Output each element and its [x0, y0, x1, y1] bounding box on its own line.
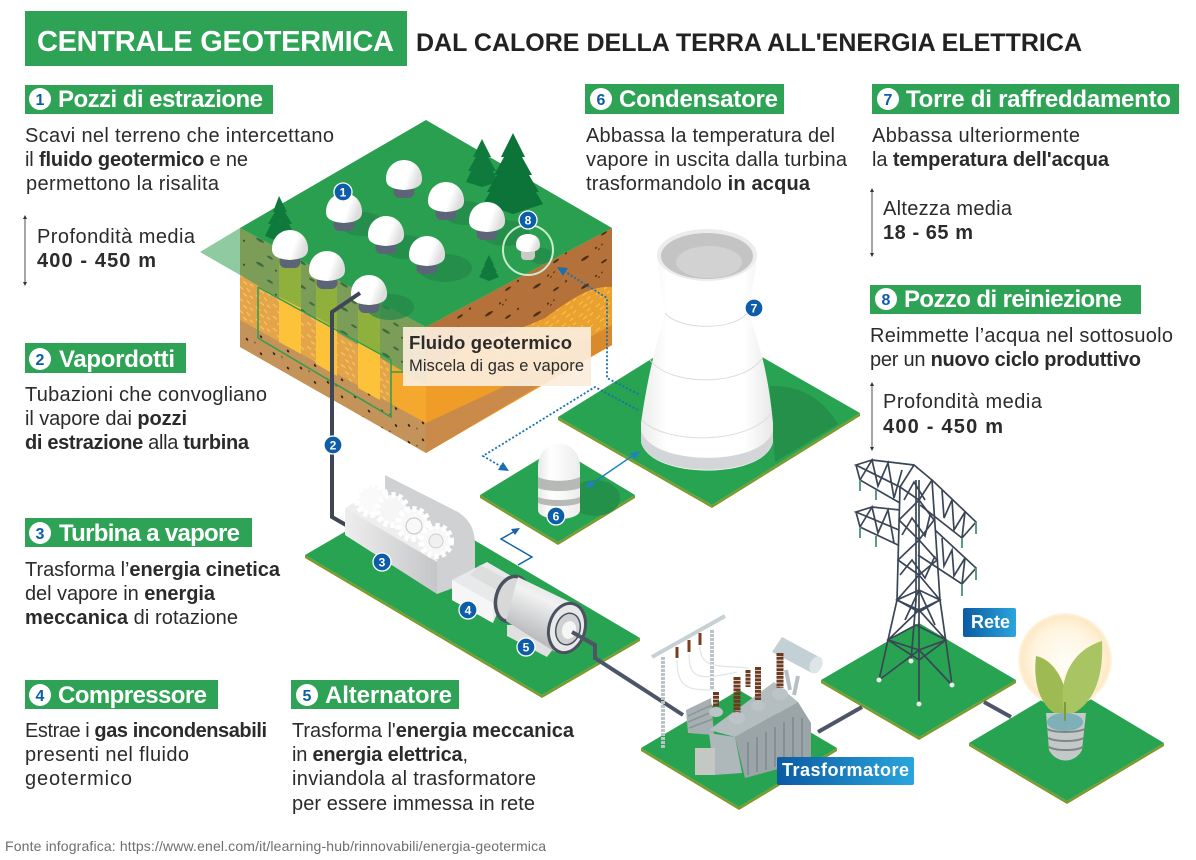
number markers on illustration: 1 [340, 186, 347, 200]
panel: 3 turbina a vapore [25, 518, 281, 629]
platform: turbine [305, 498, 640, 698]
panel: 1 pozzi di estrazione: Scavi nel terreno che intercettano [25, 125, 334, 147]
panel: 4 compressore: Compressore [58, 682, 207, 709]
cooling tower [641, 229, 773, 470]
panel: 4 compressore [25, 680, 267, 790]
double arrow: condenser to tower [585, 451, 640, 488]
panel: 2 vapordotti: Tubazioni che convogliano [25, 384, 267, 406]
cables between platforms [572, 632, 1011, 732]
panel: 2 vapordotti: il vapore dai pozzi [25, 408, 187, 430]
tank front [709, 733, 742, 775]
number markers on illustration: 6 [553, 510, 560, 524]
panel: 8 pozzo di reiniezione: Pozzo di reiniezione [904, 286, 1122, 313]
subtitle: DAL CALORE DELLA TERRA ALL'ENERGIA ELETTRICA [416, 29, 1082, 57]
alternator output cable [572, 632, 595, 645]
title banner: CENTRALE GEOTERMICA [37, 26, 394, 58]
dotted flow arrows [483, 271, 640, 467]
panel: 5 alternatore: in energia elettrica, [292, 744, 468, 766]
panel: 7 torre di raffreddamento: 7 [884, 92, 893, 109]
panel: 3 turbina a vapore: del vapore in energia [25, 583, 216, 605]
right radiator [735, 702, 811, 778]
geological block with wells [200, 120, 612, 453]
number markers on illustration [324, 183, 763, 656]
trees [265, 133, 543, 281]
panel: 8 pozzo di reiniezione: per un nuovo ciclo produttivo [870, 349, 1141, 371]
vapordotto pipe [332, 293, 360, 525]
dome shadows [340, 201, 553, 320]
insulators [860, 480, 976, 596]
platform: pylon [821, 623, 1016, 740]
extraction wells [272, 160, 505, 313]
panel: 5 alternatore: 5 [303, 688, 312, 705]
alternator [491, 573, 591, 657]
panel: 2 vapordotti: 2 [36, 352, 45, 369]
panel: 1 pozzi di estrazione: Pozzi di estrazione [58, 86, 263, 113]
label: trasformatore [777, 757, 914, 785]
panel: 1 pozzi di estrazione: il fluido geotermico e ne [25, 149, 248, 171]
panel: 1 pozzi di estrazione: permettono la risalita [26, 173, 220, 195]
condenser [538, 444, 580, 519]
steam turbine [345, 475, 475, 594]
bushings [716, 653, 780, 713]
number markers on illustration: 3 [379, 556, 386, 570]
panel: 8 pozzo di reiniezione: Profondità media [883, 391, 1043, 413]
panel: 4 compressore: 4 [36, 688, 45, 705]
panel: 6 condensatore: vapore in uscita dalla turbina [586, 149, 848, 171]
callout: fluido geotermico [403, 327, 591, 386]
gears [357, 485, 451, 556]
panel: 7 torre di raffreddamento: Torre di raffreddamento [906, 86, 1171, 113]
platform: cooling tower [558, 325, 860, 508]
panel: 5 alternatore: per essere immessa in rete [292, 793, 535, 815]
green depth outline [258, 287, 403, 417]
panel: 5 alternatore [291, 680, 575, 815]
number markers on illustration: 5 [523, 640, 530, 654]
panel: 3 turbina a vapore: 3 [36, 526, 45, 543]
panel: 2 vapordotti: di estrazione alla turbina [25, 432, 250, 454]
platform: condenser [480, 448, 635, 545]
label: rete [963, 608, 1016, 637]
panel: 5 alternatore: inviandola al trasformatore [292, 768, 536, 790]
panel: 6 condensatore: Condensatore [619, 86, 778, 113]
panel: 2 vapordotti [25, 343, 267, 454]
source caption: Fonte infografica: https://www.enel.com/it/learning-hub/rinnovabili/energia-geotermica [5, 838, 546, 854]
callout: fluido geotermico: Fluido geotermico [409, 332, 572, 353]
panel: 7 torre di raffreddamento: la temperatura dell'acqua [872, 149, 1110, 171]
panel: 6 condensatore [585, 84, 848, 195]
panel: 1 pozzi di estrazione [23, 85, 334, 286]
platform: bulb [969, 685, 1164, 804]
well shafts [279, 262, 380, 400]
panel: 6 condensatore: trasformandolo in acqua [586, 173, 811, 195]
steam arrow: turbine to condenser [501, 528, 532, 565]
panel: 1 pozzi di estrazione: 1 [36, 92, 45, 109]
compressor [452, 562, 513, 623]
label: rete: Rete [971, 612, 1010, 632]
panel: 3 turbina a vapore: Trasforma l’energia cinetica [25, 559, 281, 581]
number markers on illustration: 2 [330, 438, 337, 452]
number markers on illustration: 8 [525, 214, 532, 228]
panel: 4 compressore: Estrae i gas incondensabili [25, 720, 267, 742]
arrow heads [498, 267, 568, 471]
pylon [856, 460, 976, 704]
panel: 7 torre di raffreddamento: Altezza media [883, 198, 1013, 220]
control box [695, 748, 715, 775]
label: trasformatore: Trasformatore [782, 760, 909, 780]
panel: 5 alternatore: Trasforma l'energia meccanica [292, 720, 575, 742]
panel: 8 pozzo di reiniezione: 400 - 450 m [883, 416, 1003, 438]
number markers on illustration: 7 [751, 302, 758, 316]
reinjection well [503, 225, 553, 275]
panel: 4 compressore: presenti nel fluido [25, 744, 189, 766]
panel: 8 pozzo di reiniezione: Reimmette l’acqua nel sottosuolo [870, 325, 1173, 347]
panel: 4 compressore: geotermico [25, 768, 132, 790]
conservator [772, 637, 825, 695]
title banner [25, 11, 407, 66]
panel: 1 pozzi di estrazione: 400 - 450 m [37, 250, 156, 272]
panel: 6 condensatore: 6 [597, 92, 606, 109]
panel: 7 torre di raffreddamento [870, 84, 1179, 257]
panel: 6 condensatore: Abbassa la temperatura del [586, 125, 835, 147]
panel: 7 torre di raffreddamento: Abbassa ulteriormente [872, 125, 1080, 147]
panel: 3 turbina a vapore: meccanica di rotazione [25, 607, 238, 629]
platform: transformer [641, 690, 837, 810]
panel: 5 alternatore: Alternatore [325, 682, 452, 709]
bulb with leaves [1018, 613, 1112, 760]
panel: 2 vapordotti: Vapordotti [59, 346, 175, 373]
panel: 7 torre di raffreddamento: 18 - 65 m [883, 222, 973, 244]
panel: 3 turbina a vapore: Turbina a vapore [59, 520, 240, 547]
gantry [652, 616, 748, 748]
callout: fluido geotermico: Miscela di gas e vapore [409, 357, 584, 375]
panel: 8 pozzo di reiniezione [870, 285, 1173, 451]
number markers on illustration: 4 [465, 604, 472, 618]
panel: 1 pozzi di estrazione: Profondità media [37, 226, 196, 248]
left radiator [686, 698, 714, 735]
pylon feet [876, 658, 954, 706]
tank cover [709, 682, 798, 737]
transformer [652, 616, 825, 778]
panel: 8 pozzo di reiniezione: 8 [882, 292, 891, 309]
